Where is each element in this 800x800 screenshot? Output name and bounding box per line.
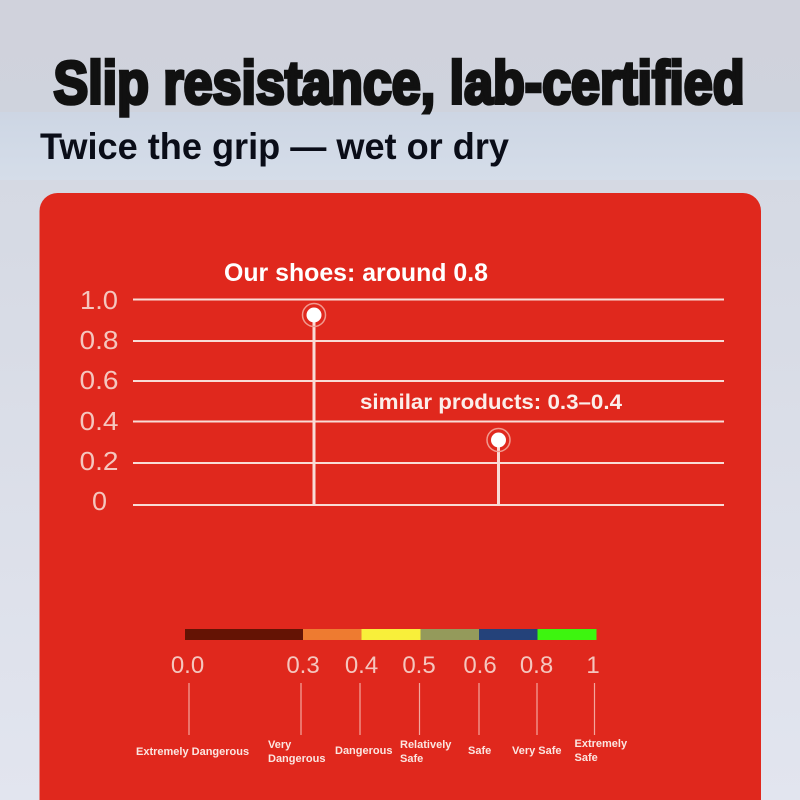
callout: our shoes: Our shoes: around 0.8 bbox=[224, 259, 488, 287]
scale labels: Safe bbox=[574, 752, 598, 764]
marker: similar products bbox=[487, 428, 510, 505]
y-axis labels: 0.6 bbox=[80, 365, 118, 395]
scale values: 0.5 bbox=[402, 652, 436, 679]
subtitle: Twice the grip — wet or dry bbox=[40, 125, 509, 167]
grid lines bbox=[133, 300, 724, 505]
y-axis labels: 0.2 bbox=[80, 446, 118, 476]
marker: our shoes bbox=[302, 304, 326, 505]
y-axis labels: 1.0 bbox=[80, 285, 118, 315]
scale labels bbox=[136, 738, 628, 765]
scale labels: Relatively bbox=[400, 739, 452, 751]
tick lines bbox=[189, 683, 594, 735]
safety scale bbox=[136, 629, 628, 765]
scale labels: Extremely bbox=[574, 738, 628, 750]
scale labels: Safe bbox=[468, 745, 491, 757]
y-axis labels: 0.4 bbox=[80, 406, 118, 436]
scale labels: Safe bbox=[400, 753, 423, 765]
scale labels: Very Safe bbox=[512, 745, 562, 757]
scale labels: Extremely Dangerous bbox=[136, 746, 249, 758]
scale values: 0.3 bbox=[286, 652, 320, 679]
panel: red card bbox=[40, 193, 761, 800]
line chart: slip resistance bbox=[80, 259, 724, 516]
scale labels: Very bbox=[268, 739, 292, 751]
scale values: 1 bbox=[586, 652, 600, 679]
y-axis labels: 0 bbox=[92, 486, 107, 516]
y-axis labels: 0.8 bbox=[80, 325, 118, 355]
scale values: 0.4 bbox=[345, 652, 378, 679]
scale labels: Dangerous bbox=[335, 745, 392, 757]
scale labels: Dangerous bbox=[268, 753, 325, 765]
scale values: 0.6 bbox=[463, 652, 497, 679]
scale values bbox=[171, 652, 600, 679]
callout: similar products: similar products: 0.3–0.4 bbox=[360, 390, 622, 414]
scale values: 0.8 bbox=[520, 652, 553, 679]
y-axis labels bbox=[80, 285, 118, 516]
colour bar bbox=[185, 629, 596, 640]
scale values: 0.0 bbox=[171, 652, 204, 679]
